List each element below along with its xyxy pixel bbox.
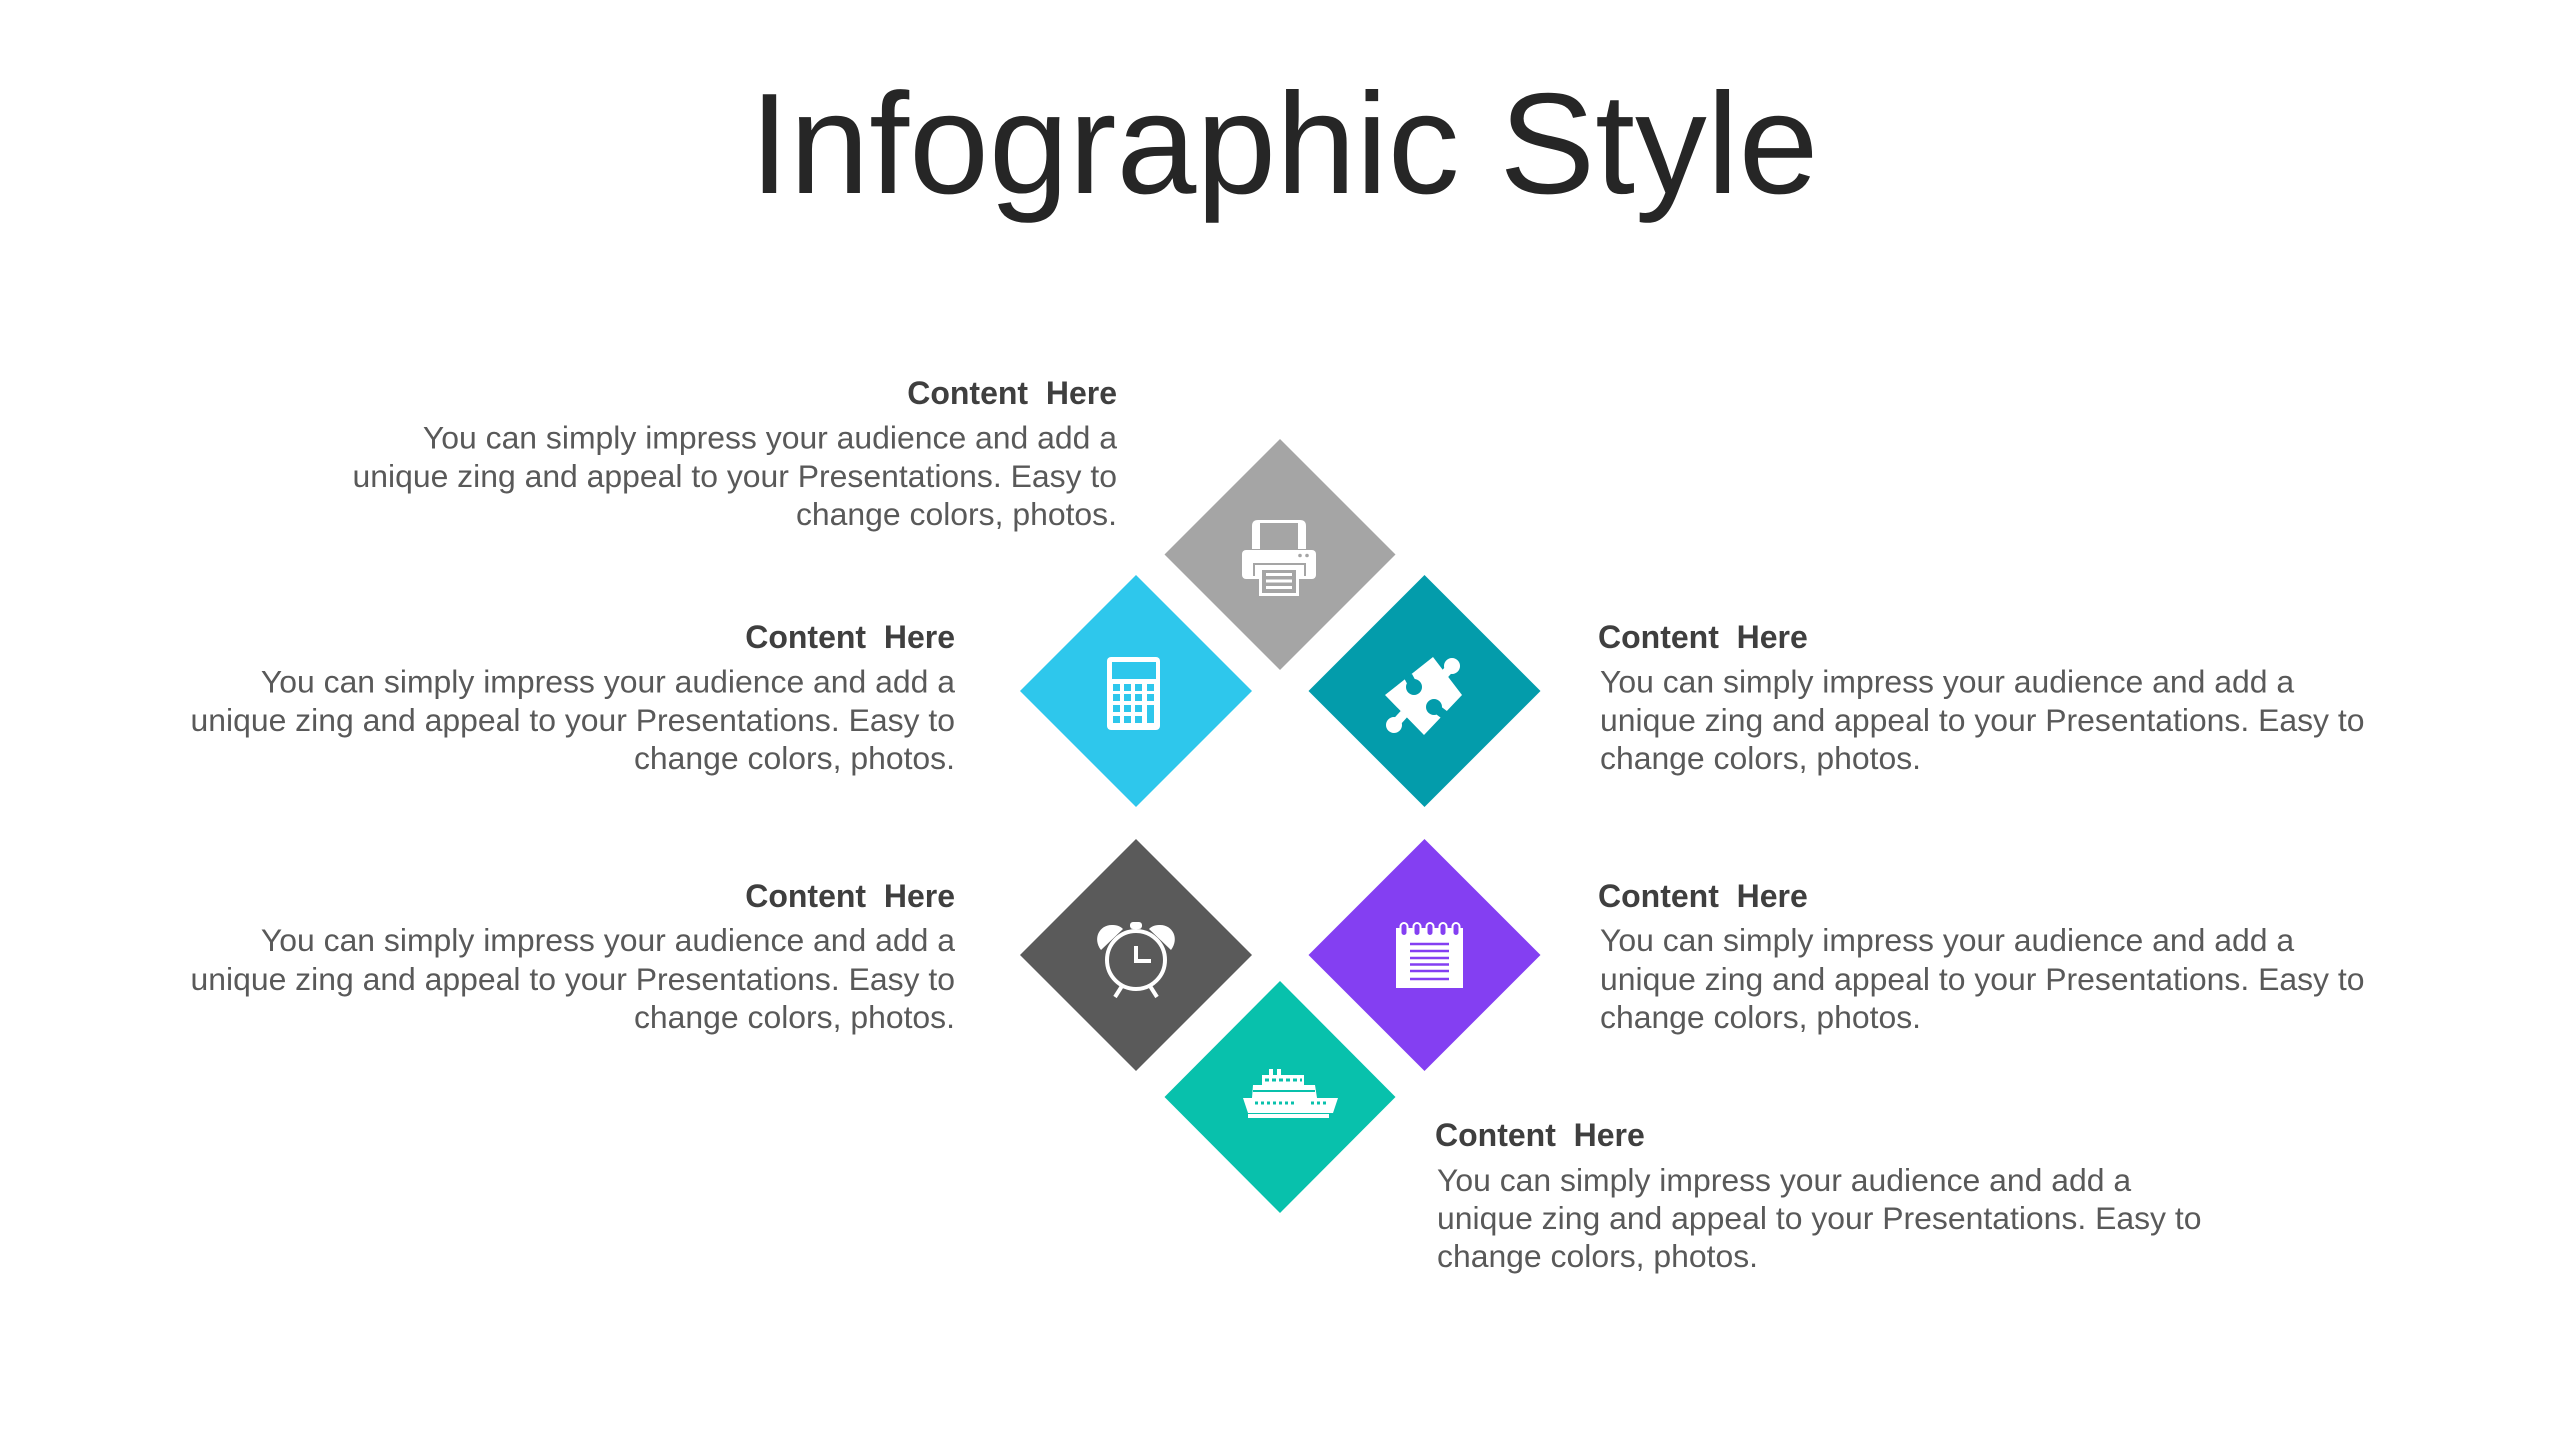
text block: middle right lower: change colors, photos. <box>1600 999 1921 1035</box>
text block: middle right lower <box>1598 878 2364 1035</box>
text block: middle left lower <box>190 878 955 1035</box>
text block: top left: Content Here <box>907 375 1117 411</box>
text block: middle left lower: change colors, photos. <box>634 999 955 1035</box>
text block: middle left lower: Content Here <box>745 878 955 914</box>
diamond: alarm clock <box>1020 839 1252 1071</box>
text block: top left: You can simply impress your audience and add a <box>423 420 1117 456</box>
text block: middle left lower: You can simply impress your audience and add a <box>261 922 955 958</box>
text block: middle right upper <box>1598 619 2364 776</box>
text block: middle left upper: change colors, photos. <box>634 740 955 776</box>
text block: bottom right: change colors, photos. <box>1437 1238 1758 1274</box>
text block: middle right lower: You can simply impress your audience and add a <box>1600 922 2294 958</box>
text block: bottom right <box>1435 1117 2202 1274</box>
text block: middle right upper: Content Here <box>1598 619 1808 655</box>
text block: top left: change colors, photos. <box>796 496 1117 532</box>
text block: top left: unique zing and appeal to your Presentations. Easy to <box>352 458 1117 494</box>
text block: middle left upper: You can simply impress your audience and add a <box>261 664 955 700</box>
text block: middle right upper: change colors, photos. <box>1600 740 1921 776</box>
text block: bottom right: unique zing and appeal to your Presentations. Easy to <box>1437 1200 2202 1236</box>
icon: printer <box>1242 520 1316 596</box>
diamond: puzzle <box>1308 575 1540 807</box>
icon: puzzle piece <box>1385 657 1462 735</box>
text block: middle left lower: unique zing and appeal to your Presentations. Easy to <box>190 961 955 997</box>
diamond: printer <box>1164 439 1396 670</box>
text block: middle left upper: unique zing and appeal to your Presentations. Easy to <box>190 702 955 738</box>
diamond: calculator <box>1020 575 1252 807</box>
icon: alarm clock <box>1097 922 1175 997</box>
diamond: notepad <box>1308 839 1540 1071</box>
text block: middle left upper: Content Here <box>745 619 955 655</box>
title: Infographic Style <box>750 64 1818 224</box>
icon: calculator <box>1107 657 1160 730</box>
icon: ship <box>1243 1069 1338 1118</box>
text block: middle right lower: unique zing and appeal to your Presentations. Easy to <box>1600 961 2364 997</box>
text block: bottom right: You can simply impress your audience and add a <box>1437 1162 2131 1198</box>
icon: notepad <box>1396 923 1463 988</box>
text block: middle right lower: Content Here <box>1598 878 1808 914</box>
text block: bottom right: Content Here <box>1435 1117 1645 1153</box>
text block: middle right upper: You can simply impress your audience and add a <box>1600 664 2294 700</box>
text block: top left <box>352 375 1117 532</box>
diamond: ship <box>1164 981 1396 1213</box>
text block: middle left upper <box>190 619 955 776</box>
text block: middle right upper: unique zing and appeal to your Presentations. Easy to <box>1600 702 2364 738</box>
